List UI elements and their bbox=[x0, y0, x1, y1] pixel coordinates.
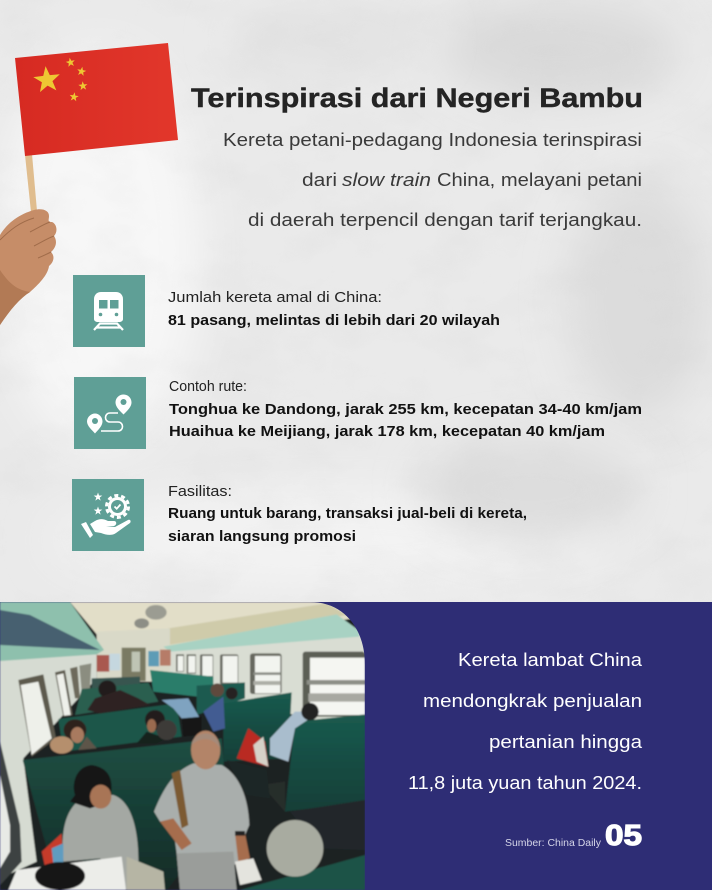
icon: train bbox=[73, 275, 145, 347]
callout text bbox=[408, 650, 643, 793]
foreground head bbox=[267, 820, 323, 877]
intro text: Kereta petani-pedagang Indonesia terinspirasi bbox=[223, 130, 642, 150]
item: fasilitas bbox=[72, 479, 527, 551]
intro text: slow train bbox=[342, 170, 431, 190]
carriage walls and ceiling bbox=[0, 602, 365, 890]
item text bbox=[168, 484, 527, 545]
flag cloth bbox=[15, 43, 178, 156]
seated man bbox=[154, 731, 262, 890]
flag in hand bbox=[0, 43, 178, 325]
intro text: di daerah terpencil dengan tarif terjangkau. bbox=[248, 210, 642, 230]
title: Terinspirasi dari Negeri Bambu bbox=[191, 83, 643, 113]
item: contoh rute bbox=[74, 377, 642, 449]
icon: hand with gear bbox=[72, 479, 144, 551]
small star 2 bbox=[76, 66, 87, 76]
textured paper background bbox=[0, 0, 712, 602]
callout text: Kereta lambat China bbox=[458, 650, 643, 670]
seated woman bbox=[42, 765, 165, 890]
callout text: mendongkrak penjualan bbox=[423, 691, 642, 711]
item: jumlah kereta bbox=[73, 275, 500, 347]
item text: Tonghua ke Dandong, jarak 255 km, kecepatan 34-40 km/jam bbox=[169, 402, 642, 418]
item text bbox=[169, 379, 642, 440]
item text bbox=[168, 290, 500, 329]
small star 1 bbox=[65, 57, 76, 67]
item text: Fasilitas: bbox=[168, 484, 232, 500]
item text: Huaihua ke Meijiang, jarak 178 km, kecepatan 40 km/jam bbox=[169, 424, 605, 440]
seats bbox=[23, 670, 365, 890]
panel: navy callout bbox=[0, 602, 712, 890]
callout text: 11,8 juta yuan tahun 2024. bbox=[408, 773, 642, 793]
intro text: dari bbox=[302, 170, 337, 190]
windows bbox=[0, 650, 365, 885]
item text: 81 pasang, melintas di lebih dari 20 wilayah bbox=[168, 313, 500, 329]
callout text: pertanian hingga bbox=[489, 732, 643, 752]
item text: Contoh rute: bbox=[169, 379, 247, 395]
item text: Jumlah kereta amal di China: bbox=[168, 290, 382, 306]
item text: siaran langsung promosi bbox=[168, 529, 356, 545]
intro text bbox=[223, 130, 642, 230]
foreground table bbox=[8, 857, 126, 890]
hand bbox=[0, 209, 56, 325]
source: Sumber: China Daily bbox=[505, 838, 601, 849]
page number: 05 bbox=[605, 820, 642, 852]
item text: Ruang untuk barang, transaksi jual-beli di kereta, bbox=[168, 506, 527, 522]
passengers back bbox=[50, 680, 320, 767]
photo: train carriage interior bbox=[0, 602, 365, 890]
small star 4 bbox=[69, 92, 79, 101]
flag pole bbox=[25, 154, 37, 212]
icon: route pins bbox=[74, 377, 146, 449]
small star 3 bbox=[78, 81, 88, 90]
intro text: China, melayani petani bbox=[437, 170, 642, 190]
large star bbox=[32, 65, 61, 93]
